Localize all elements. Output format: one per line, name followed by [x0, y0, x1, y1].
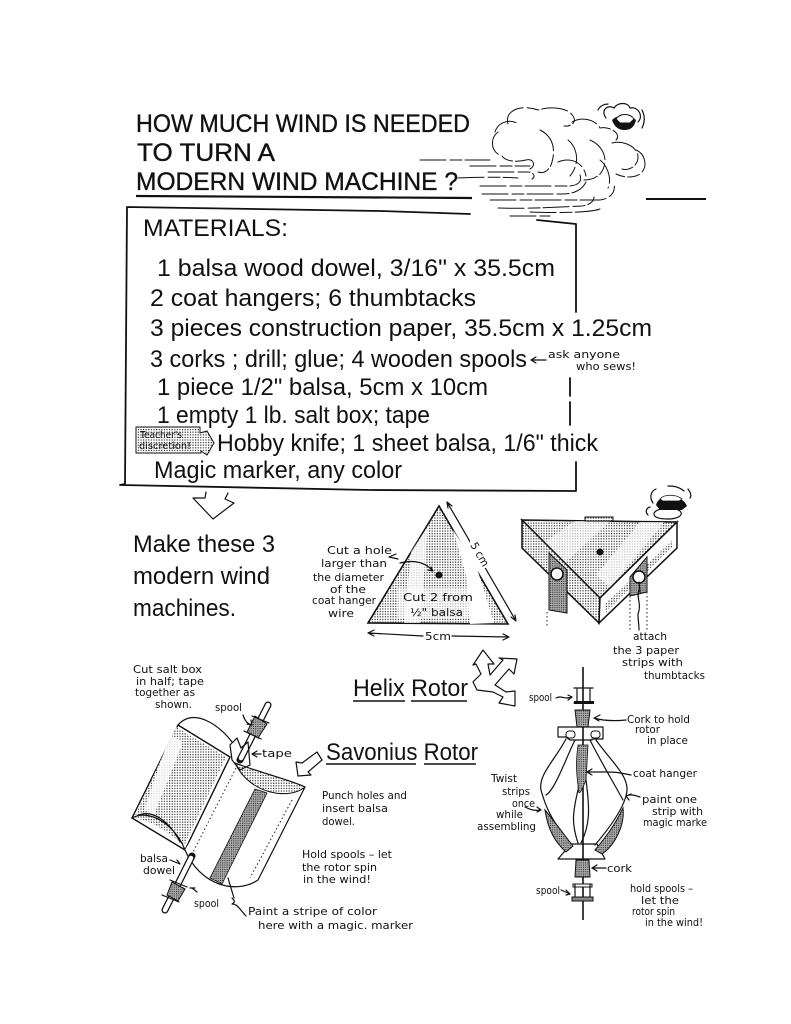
- helix labels: strip with: [652, 805, 703, 818]
- text: make these 3 machines: Make these 3: [133, 531, 275, 558]
- helix labels: hold spools –: [630, 882, 693, 895]
- twisted strips: [541, 739, 627, 854]
- label: attach strips: attach: [633, 630, 667, 643]
- label: cut a hole: wire: [328, 607, 354, 620]
- label: cut a hole: the diameter: [313, 571, 384, 584]
- diagram: balsa triangle: [312, 502, 516, 643]
- savonius labels: spool: [215, 701, 242, 714]
- paper strips with thumbtacks: [547, 553, 647, 632]
- label: cut a hole: Cut a hole: [327, 544, 392, 557]
- rotor right half: [185, 763, 305, 887]
- savonius labels: here with a magic. marker: [258, 919, 414, 932]
- text: make these 3 machines: machines.: [133, 595, 236, 622]
- materials list: 3 corks ; drill; glue; 4 wooden spools: [150, 346, 527, 373]
- title: MODERN WIND MACHINE ?: [136, 168, 458, 196]
- text: make these 3 machines: [133, 531, 275, 622]
- label: cut a hole: [312, 544, 392, 620]
- dimension arrow: side 5 cm: 5 cm: [467, 540, 492, 569]
- label: attach strips: the 3 paper: [613, 644, 679, 657]
- icon: wind cloud with fly: [420, 104, 706, 216]
- savonius labels: together as: [135, 686, 195, 699]
- callout: ask anyone who sews: [531, 348, 636, 373]
- label: attach strips: strips with: [622, 656, 683, 669]
- helix labels: assembling: [477, 820, 536, 833]
- helix labels: cork: [607, 862, 633, 875]
- savonius labels: Paint a stripe of color: [248, 905, 378, 918]
- label: cut a hole: coat hanger: [312, 594, 376, 607]
- callout: ask anyone who sews: who sews!: [576, 360, 636, 373]
- helix labels: spool: [529, 691, 552, 704]
- helix labels: rotor spin: [632, 905, 675, 918]
- materials list: [150, 255, 652, 484]
- savonius labels: in the wind!: [303, 873, 371, 886]
- helix labels: while: [496, 808, 523, 821]
- helix labels: once: [512, 797, 535, 810]
- callout: teacher's discretion tag: discretion!: [139, 441, 191, 452]
- helix labels: magic marke: [643, 816, 707, 829]
- dimension arrow: base 5 cm: [368, 630, 509, 643]
- materials list: 1 empty 1 lb. salt box; tape: [157, 402, 430, 429]
- dimension arrow: side 5 cm: [447, 502, 516, 621]
- arrow: three-way branch: [473, 650, 517, 706]
- heading: savonius rotor: Savonius Rotor: [326, 739, 478, 766]
- savonius labels: Cut salt box: [133, 663, 203, 676]
- panel: materials box: [120, 207, 652, 491]
- savonius labels: tape: [262, 747, 292, 760]
- materials list: 1 piece 1/2" balsa, 5cm x 10cm: [157, 374, 488, 401]
- helix labels: let the: [641, 894, 679, 907]
- title: [136, 110, 472, 198]
- savonius labels: shown.: [155, 698, 192, 711]
- helix labels: rotor: [635, 723, 660, 736]
- label: cut 2 from balsa: Cut 2 from: [403, 591, 473, 604]
- savonius labels: [133, 663, 414, 932]
- helix labels: Cork to hold: [627, 713, 690, 726]
- helix labels: Twist: [490, 772, 518, 785]
- spools and corks: [572, 688, 594, 901]
- heading: helix rotor: Helix Rotor: [353, 675, 468, 702]
- arrow: to savonius rotor: [296, 752, 322, 776]
- diagram: savonius rotor: [132, 663, 414, 932]
- rotor left half: [132, 718, 232, 850]
- savonius labels: insert balsa: [322, 802, 388, 815]
- label: cut 2 from balsa: [403, 591, 473, 619]
- title: HOW MUCH WIND IS NEEDED: [136, 110, 470, 138]
- savonius labels: in half; tape: [136, 675, 204, 688]
- savonius labels: Punch holes and: [322, 789, 407, 802]
- materials list: 1 balsa wood dowel, 3/16" x 35.5cm: [157, 255, 555, 282]
- diagram: assembled triangular helix end: [522, 486, 705, 682]
- materials list: 2 coat hangers; 6 thumbtacks: [150, 285, 476, 312]
- top and bottom frames: [558, 727, 605, 859]
- savonius labels: balsa: [140, 852, 168, 865]
- helix labels: [477, 691, 707, 929]
- savonius labels: the rotor spin: [302, 861, 377, 874]
- dimension arrow: base 5 cm: 5cm: [425, 630, 451, 643]
- callout: teacher's discretion tag: Teacher's: [139, 430, 182, 441]
- callout: ask anyone who sews: ask anyone: [548, 348, 620, 361]
- savonius labels: spool: [194, 897, 219, 910]
- arrow: down from materials: [193, 492, 234, 519]
- savonius labels: Hold spools – let: [302, 848, 393, 861]
- heading: materials: MATERIALS:: [143, 215, 288, 242]
- label: cut 2 from balsa: ½" balsa: [410, 606, 463, 619]
- icon: fly: [646, 486, 691, 519]
- label: cut a hole: larger than: [321, 557, 387, 570]
- label: attach strips: [613, 630, 705, 682]
- title: TO TURN A: [137, 139, 275, 167]
- helix labels: coat hanger: [633, 767, 697, 780]
- label: attach strips: thumbtacks: [644, 669, 705, 682]
- savonius labels: dowel: [143, 864, 175, 877]
- helix labels: strips: [502, 785, 530, 798]
- savonius labels: dowel.: [322, 815, 355, 828]
- helix labels: in the wind!: [645, 916, 703, 929]
- materials list: 3 pieces construction paper, 35.5cm x 1.25cm: [150, 315, 652, 342]
- text: make these 3 machines: modern wind: [133, 563, 270, 590]
- helix labels: in place: [647, 734, 688, 747]
- materials list: Hobby knife; 1 sheet balsa, 1/6" thick: [217, 430, 599, 457]
- helix labels: spool: [536, 884, 560, 897]
- helix labels: paint one: [642, 793, 697, 806]
- callout: teacher's discretion tag: [136, 427, 214, 455]
- dowel and spools: [162, 705, 269, 910]
- materials list: Magic marker, any color: [154, 457, 402, 484]
- label: cut a hole: of the: [330, 583, 366, 596]
- diagram: helix rotor assembled: [477, 667, 707, 929]
